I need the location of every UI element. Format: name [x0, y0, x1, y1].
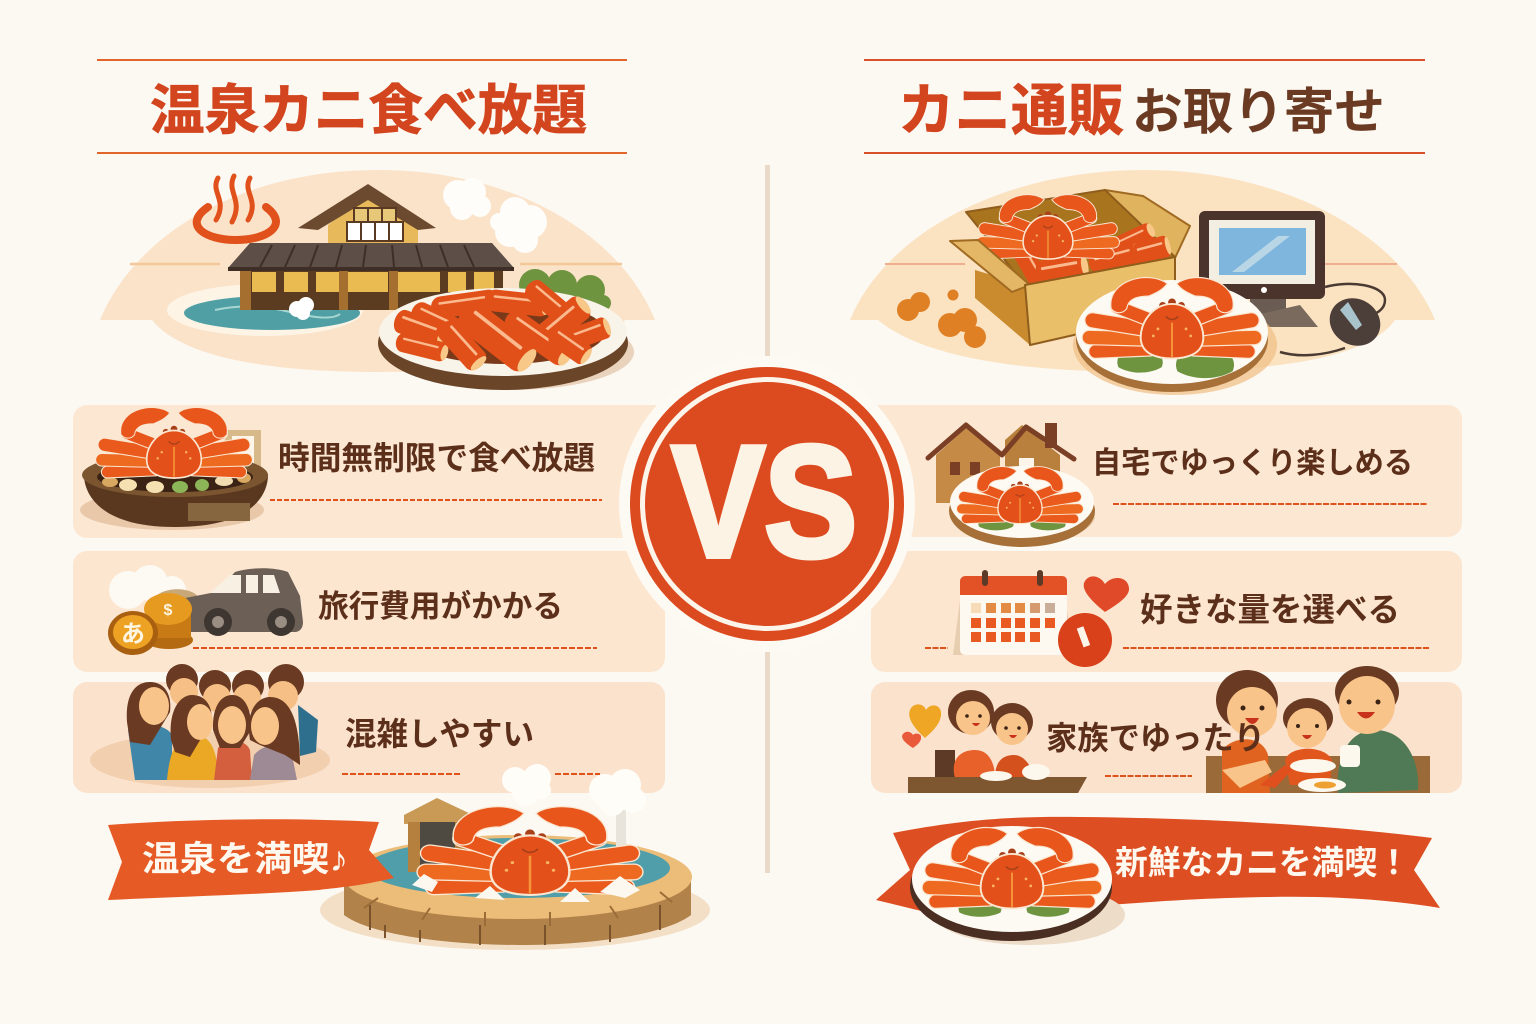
right title: [864, 60, 1425, 153]
dashed underline: [1113, 503, 1428, 505]
label text: 混雑しやすい: [345, 716, 534, 752]
bush: [519, 269, 611, 311]
label text: 家族でゆったり: [1046, 720, 1265, 756]
wooden box: [404, 798, 473, 872]
label text: 自宅でゆっくり楽しめる: [1092, 447, 1413, 480]
crab plate: [910, 826, 1125, 945]
hero backdrop: [100, 170, 655, 372]
computer mouse and cable: [1280, 284, 1389, 355]
left hero illustration: [100, 170, 655, 390]
left title: 温泉カニ食べ放題: [150, 81, 587, 141]
row: travel cost: [108, 565, 597, 655]
wooden tub: [344, 880, 691, 945]
panel: left row 1: [73, 405, 673, 538]
hero backdrop: [850, 170, 1435, 372]
VS badge: VS: [672, 414, 857, 590]
left banner: [108, 819, 394, 900]
row: eat slowly at home: [928, 423, 1428, 547]
icon: car and coins: あ: [121, 621, 145, 648]
center divider: [765, 165, 770, 873]
panel: left row 3: [73, 682, 665, 793]
computer monitor: [1199, 211, 1325, 327]
front row people: [127, 682, 300, 780]
panel: right row 2: [871, 551, 1462, 672]
icon: calendar, heart and badge: [953, 570, 1129, 667]
dashed underline: [342, 773, 600, 775]
icon: onsen mark: [197, 176, 276, 240]
icon: crowd of people: [90, 664, 330, 788]
icon: crab hot pot: [80, 408, 268, 530]
back row heads: [166, 664, 318, 756]
icon: houses and plate: [928, 423, 1095, 547]
icon: car and coins: [108, 565, 303, 655]
dashed underline: [193, 647, 597, 649]
panel: right row 1: [860, 405, 1462, 537]
right title: お取り寄せ: [1132, 84, 1385, 140]
row: family time: [902, 666, 1430, 793]
crab in hot spring illustration: [320, 764, 710, 950]
right banner with crab plate: [876, 817, 1440, 945]
foam: [412, 874, 640, 902]
orange stains: [897, 290, 986, 348]
label text: 好きな量を選べる: [1140, 591, 1400, 628]
dashed underline: [1105, 775, 1192, 777]
label text: 時間無制限で食べ放題: [278, 440, 595, 476]
steam: [502, 764, 646, 860]
row: crowded: [90, 664, 600, 788]
pond: [167, 284, 363, 336]
open cardboard box: [950, 190, 1190, 345]
right banner with crab plate: 新鮮なカニを満喫！: [1115, 844, 1410, 881]
crab leg plate: [378, 276, 634, 390]
ryokan building: [228, 184, 514, 320]
icon: family eating crab: [1206, 666, 1430, 793]
VS badge: [619, 356, 915, 652]
right hero illustration: [850, 170, 1435, 395]
dashed underline: [925, 647, 1430, 649]
panel: right row 3: [871, 682, 1462, 793]
steam clouds: [443, 178, 547, 253]
left banner: 温泉を満喫♪: [142, 840, 348, 879]
icon: mother and child at table: [902, 690, 1087, 793]
dashed underline: [270, 499, 602, 501]
icon: car and coins: $: [164, 602, 173, 619]
row: choose amount: [925, 570, 1430, 667]
row: time limit buffet: [80, 408, 602, 530]
panel: left row 2: [73, 551, 665, 672]
crab plate: [1073, 278, 1277, 395]
right title: カニ通販: [898, 79, 1124, 142]
label text: 旅行費用がかかる: [318, 589, 563, 624]
